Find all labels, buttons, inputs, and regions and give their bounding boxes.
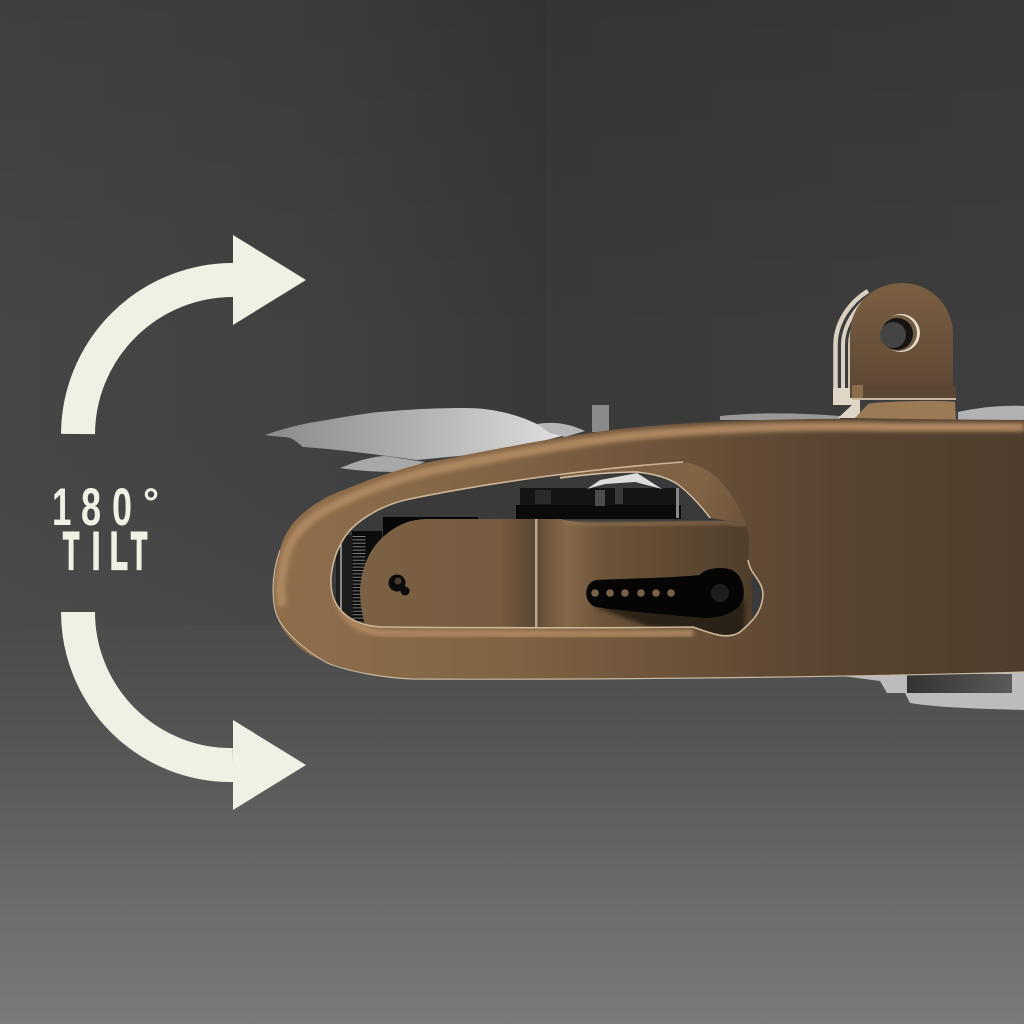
bevel edge line — [560, 472, 710, 518]
far right blade — [958, 406, 1024, 422]
far thin blade — [720, 413, 840, 420]
tilt arm — [360, 519, 752, 627]
mount foot — [833, 388, 865, 418]
arm pivot screw — [388, 574, 410, 596]
label: 180 degree tilt: I — [92, 522, 100, 581]
pinion gear — [336, 531, 382, 621]
label: 180 degree tilt: T — [63, 521, 79, 580]
servo horn shadow — [592, 600, 745, 640]
top rim highlight — [281, 426, 1024, 606]
propeller blades — [265, 405, 1024, 472]
window edge line — [331, 462, 763, 636]
label: 180 degree tilt — [52, 477, 159, 581]
frame body — [273, 419, 1024, 679]
lower tilt arrow — [78, 612, 306, 810]
motor bell — [516, 473, 681, 519]
camera mount — [833, 283, 956, 420]
label: 180 degree tilt: 8 — [81, 477, 101, 537]
outer left edge line — [273, 550, 327, 663]
label: 180 degree tilt: 1 — [52, 477, 71, 537]
label: 180 degree tilt: L — [110, 522, 128, 581]
servo horn — [586, 568, 744, 618]
mount base — [855, 401, 956, 420]
window interior — [332, 462, 752, 635]
label: 180 degree tilt: T — [131, 521, 147, 580]
mount fins — [836, 291, 868, 388]
mount plate — [850, 283, 953, 398]
window inner bevel, upper right — [560, 462, 747, 528]
black servo block — [383, 517, 478, 537]
mount hole — [882, 314, 920, 352]
motor pin — [592, 405, 609, 432]
label: 180 degree tilt: 0 — [112, 477, 132, 537]
underside parts: gimbal disc — [827, 672, 1024, 710]
arm upper edge highlight — [565, 521, 752, 526]
arm centre seam — [535, 519, 538, 627]
label: 180 degree tilt: ° — [143, 481, 159, 525]
upper tilt arrow — [78, 235, 306, 434]
window rim highlight — [338, 600, 693, 634]
